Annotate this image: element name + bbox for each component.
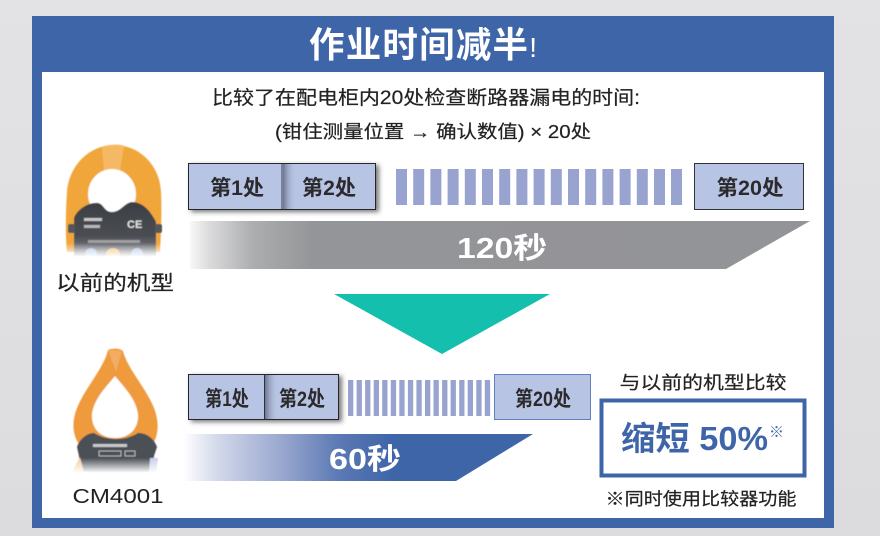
callout: 50 percent reduction: 缩短 50% xyxy=(621,420,768,457)
previous model step boxes xyxy=(188,164,804,210)
step box 20: 第20处 xyxy=(515,388,571,411)
description line 2: (钳住测量位置 → 确认数值) × 20处 xyxy=(275,122,591,142)
step boxes 1 and 2: 第1处 xyxy=(205,388,249,411)
step boxes 1 and 2: 第1处 xyxy=(210,177,264,200)
step box 20: 第20处 xyxy=(716,177,784,200)
bar: 120 seconds: 120秒 xyxy=(457,232,547,265)
step box 20 xyxy=(694,164,804,210)
icon: CM4001 clamp meter xyxy=(68,349,162,473)
step box 20 xyxy=(494,374,590,420)
icon: previous clamp meter: CE xyxy=(127,219,142,231)
CM4001 step boxes xyxy=(188,374,590,420)
bar: 120 seconds xyxy=(190,221,810,269)
step boxes 1 and 2 xyxy=(188,374,338,420)
stripes xyxy=(396,169,682,205)
bar: 60 seconds xyxy=(183,434,533,481)
bar: 60 seconds: 60秒 xyxy=(329,443,401,476)
footnote: ※同时使用比较器功能 xyxy=(606,489,796,509)
callout: 50 percent reduction: ※ xyxy=(769,424,784,441)
icon: previous clamp meter xyxy=(60,145,170,262)
stripes xyxy=(348,380,490,416)
callout: 50 percent reduction xyxy=(602,400,804,476)
label: CM4001: CM4001 xyxy=(72,485,164,508)
heading: 作业时间减半! xyxy=(309,25,537,65)
step boxes 1 and 2: 第2处 xyxy=(279,388,325,411)
step boxes 1 and 2: 第2处 xyxy=(302,177,356,200)
label: previous model: 以前的机型 xyxy=(56,272,174,295)
comparison caption: 与以前的机型比较 xyxy=(620,373,786,393)
panel: white content area xyxy=(42,72,824,518)
arrow: down triangle xyxy=(334,294,550,354)
description line 1: 比较了在配电柜内20处检查断路器漏电的时间: xyxy=(212,87,640,109)
step boxes 1 and 2 xyxy=(188,164,376,210)
